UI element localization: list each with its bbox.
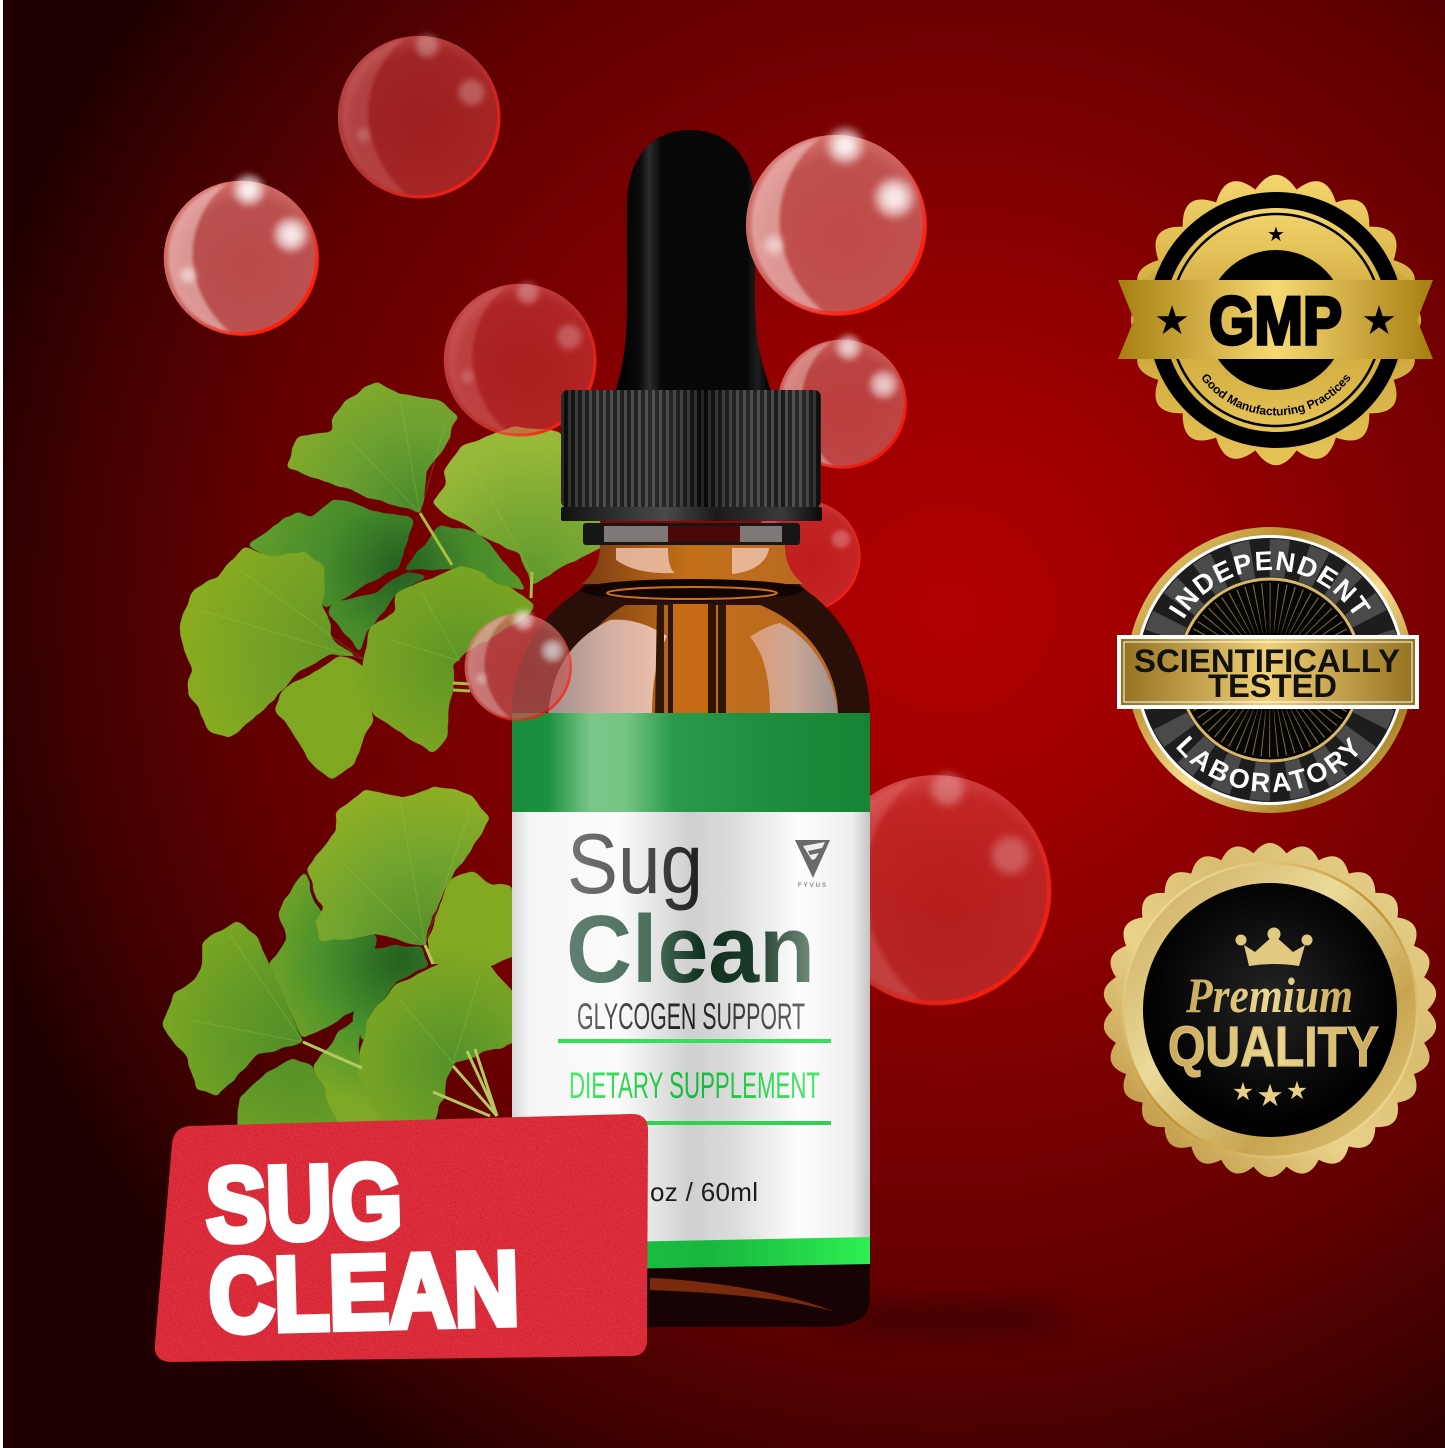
sticker: Sug Clean tag [155,1114,648,1362]
sticker text: SUG: SUG [205,1143,404,1264]
ginkgo leaves: lower cluster [163,787,525,1130]
stars [1232,1076,1308,1114]
label text: glycogen support: GLYCOGEN SUPPORT [577,996,805,1037]
dropper bulb [615,130,771,392]
neck flare [582,545,803,584]
bubble: top center dim [338,34,500,198]
badge: GMP [1118,174,1433,466]
label rules [558,1039,831,1043]
bottom dark glass [512,1262,870,1327]
shoulder amber fill [560,605,838,715]
curved caption: Good Manufacturing Practices [1202,374,1350,416]
bubble: beside cap right [778,334,906,468]
bottle [512,130,870,1327]
curved text: laboratory: LABORATORY [1176,736,1358,792]
amber glass body [512,545,870,1327]
Premium script: Premium [1185,967,1353,1023]
crown [1236,928,1312,966]
banner text: SCIENTIFICALLY [1134,643,1400,679]
badge: GMP: ★ [1267,222,1285,246]
badge: scientifically tested: TESTED [1208,668,1337,704]
collar ring [583,523,800,545]
dark ring inside shoulder [580,579,804,601]
label text: Clean: Clean [566,896,815,1003]
bubble: middle left [444,282,596,436]
bottle shadow [825,1305,1075,1331]
banner [1117,635,1419,709]
QUALITY text: QUALITY [1168,1015,1379,1079]
stars: ★ [1232,1077,1254,1106]
bubble: top right [746,128,926,315]
brand logo: FYVUS [798,883,828,889]
label text: volume: oz / 60ml [650,1177,758,1207]
sticker text: CLEAN: CLEAN [208,1231,520,1355]
badge: GMP: ★ [1361,298,1397,344]
ginkgo leaves: upper cluster [180,382,610,780]
ribbon tails [1140,262,1412,378]
label text: dietary supplement: DIETARY SUPPLEMENT [569,1065,820,1106]
stars: ★ [1256,1078,1284,1114]
bubble: behind neck right [750,499,860,611]
stars: ★ [1154,298,1190,344]
left highlight [548,620,667,715]
curved text: independent: INDEPENDENT [1168,551,1372,618]
badge: premium quality [1104,843,1436,1177]
bubble: large lower right [821,773,1051,1005]
bubble: over leaf and bottle shoulder [465,609,571,720]
ribbon [1118,280,1433,359]
badge: scientifically tested [1117,527,1419,813]
right highlight [750,623,838,715]
dropper tube [655,604,726,715]
cap [561,390,821,508]
label [512,713,870,813]
label text: Sug: Sug [567,817,703,912]
stars: ★ [1286,1076,1308,1105]
GMP text: GMP [1209,283,1342,359]
bubble: top left [164,175,318,335]
brand logo [795,840,830,889]
